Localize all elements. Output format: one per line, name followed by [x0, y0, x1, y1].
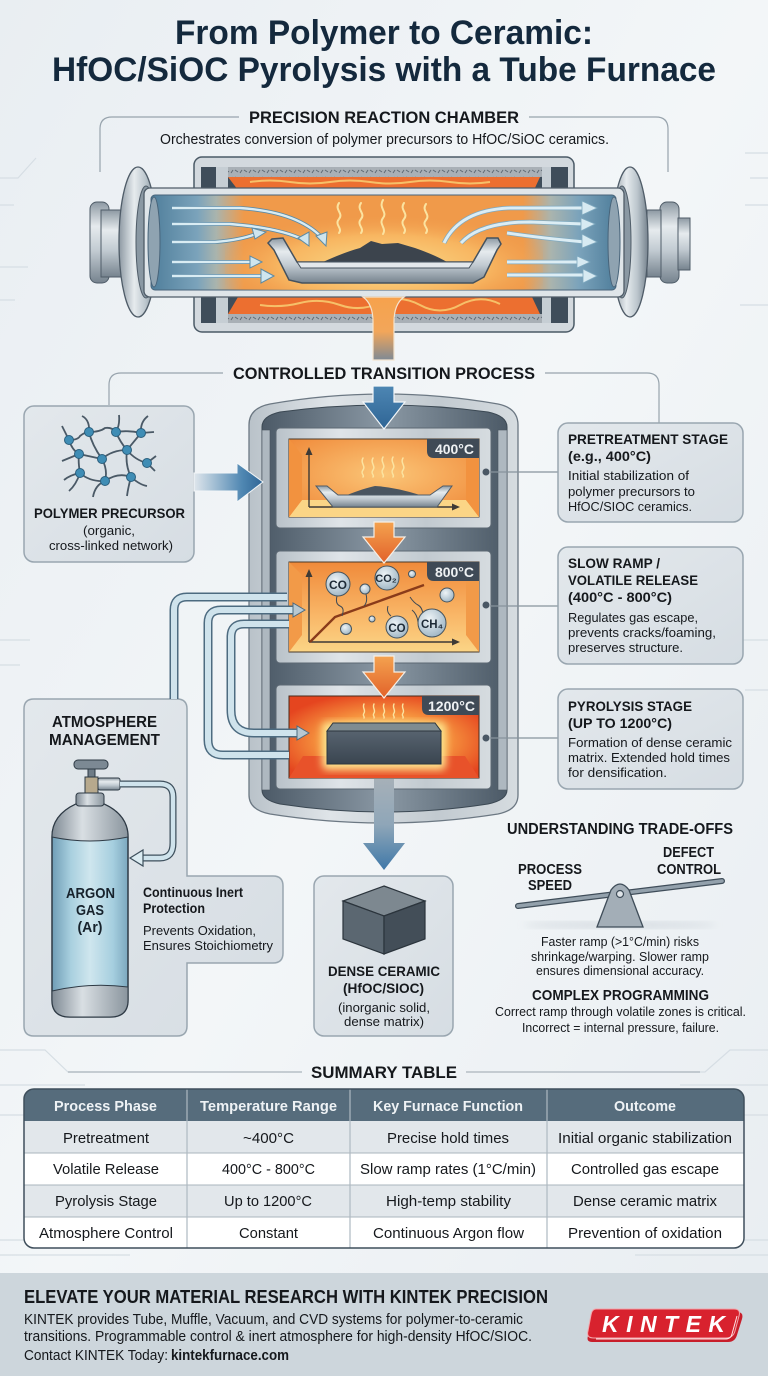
chamber: 800 C: CO — [388, 623, 406, 635]
trade-offs — [495, 821, 746, 1035]
inert protection text: Prevents Oxidation, — [143, 923, 256, 938]
callout: pretreatment stage: Initial stabilization of — [568, 468, 689, 483]
row: atmosphere control: Constant — [239, 1225, 299, 1242]
polymer label: cross-linked network) — [49, 538, 173, 553]
title — [52, 14, 716, 89]
callout: slow ramp: VOLATILE RELEASE — [568, 572, 698, 588]
footer band — [0, 1273, 768, 1376]
sample boat with precursor — [268, 238, 501, 283]
seesaw diagram — [518, 845, 722, 928]
row: pyrolysis stage: Up to 1200°C — [224, 1193, 312, 1210]
row: pretreatment: ~400°C — [243, 1130, 294, 1147]
cylinder label: GAS — [76, 902, 104, 919]
heading: precision reaction chamber: Orchestrates conversion of polymer precursors to HfOC/SiOC ceramics. — [160, 132, 609, 148]
callout: pyrolysis stage — [558, 689, 743, 789]
cylinder outlet pipe — [120, 784, 173, 858]
trade-offs: UNDERSTANDING TRADE-OFFS — [507, 821, 733, 838]
row: volatile release: Volatile Release — [53, 1161, 159, 1178]
panel: atmosphere management — [24, 699, 283, 1036]
table header: Outcome — [614, 1098, 676, 1115]
title: HfOC/SiOC Pyrolysis with a Tube Furnace — [52, 51, 716, 89]
callout: pyrolysis stage: (UP TO 1200°C) — [568, 715, 672, 731]
ceramic label: (inorganic solid, — [338, 1000, 430, 1015]
logo: KINTEK: KINTEK — [602, 1311, 726, 1337]
connector lines to callouts — [490, 472, 558, 738]
trade-off description: Faster ramp (>1°C/min) risks — [541, 934, 699, 949]
callout: slow ramp: preserves structure. — [568, 640, 683, 655]
left flange — [90, 167, 157, 317]
heading: controlled transition process — [109, 364, 659, 423]
logo: KINTEK — [588, 1309, 742, 1342]
seesaw diagram: SPEED — [528, 878, 572, 894]
callout: slow ramp — [558, 547, 743, 664]
callout: slow ramp: SLOW RAMP / — [568, 555, 660, 571]
ceramic label — [328, 963, 440, 1029]
inert protection text: Continuous Inert — [143, 885, 243, 900]
callout: slow ramp: prevents cracks/foaming, — [568, 625, 716, 640]
chamber: 800 C: CH₄ — [421, 619, 443, 631]
reactor vessel — [249, 394, 518, 823]
polymer label: POLYMER PRECURSOR — [34, 505, 185, 521]
summary table — [24, 1089, 744, 1248]
row: atmosphere control: Continuous Argon flow — [373, 1225, 524, 1242]
heading: precision reaction chamber — [100, 108, 668, 172]
arrow: into vessel — [363, 386, 405, 429]
chamber: 400 C: 400°C — [435, 441, 474, 457]
row: pretreatment: Pretreatment — [63, 1130, 150, 1147]
arrow: out of vessel — [363, 779, 405, 870]
right flange — [612, 167, 690, 317]
cylinder label: (Ar) — [78, 919, 102, 936]
icon: argon cylinder — [52, 760, 128, 1017]
connector dots — [482, 468, 490, 742]
trade-off description: shrinkage/warping. Slower ramp — [531, 949, 709, 964]
neck connector — [363, 297, 404, 360]
atmosphere heading: MANAGEMENT — [49, 732, 160, 749]
table header: Temperature Range — [200, 1098, 337, 1115]
callout: pyrolysis stage: Formation of dense ceramic — [568, 735, 733, 750]
complex programming: Correct ramp through volatile zones is critical. — [495, 1004, 746, 1019]
callout: pyrolysis stage: matrix. Extended hold times — [568, 750, 731, 765]
chamber: 1200 C — [276, 685, 491, 789]
heading: summary table: SUMMARY TABLE — [311, 1063, 457, 1082]
row: pretreatment — [63, 1130, 732, 1147]
panel: dense ceramic — [314, 876, 453, 1036]
chamber: 800 C — [276, 551, 491, 663]
callout: slow ramp: Regulates gas escape, — [568, 610, 698, 625]
atmosphere heading: ATMOSPHERE — [52, 714, 157, 731]
cylinder label: ARGON — [66, 885, 115, 902]
title: From Polymer to Ceramic: — [175, 14, 593, 52]
row: volatile release: Controlled gas escape — [571, 1161, 719, 1178]
arrow: transfer to 1200 C — [363, 656, 405, 698]
row: volatile release: Slow ramp rates (1°C/min) — [360, 1161, 536, 1178]
callout: slow ramp: (400°C - 800°C) — [568, 589, 672, 605]
panel: polymer precursor — [24, 406, 194, 562]
ceramic label: DENSE CERAMIC — [328, 963, 440, 979]
row: pretreatment: Precise hold times — [387, 1130, 509, 1147]
callout: pretreatment stage: (e.g., 400°C) — [568, 448, 651, 464]
footer heading: ELEVATE YOUR MATERIAL RESEARCH WITH KINTEK PRECISION — [24, 1287, 548, 1307]
seesaw diagram: CONTROL — [657, 862, 721, 878]
heading: precision reaction chamber: PRECISION REACTION CHAMBER — [249, 108, 519, 127]
table header — [54, 1098, 676, 1115]
chamber: 400 C — [276, 428, 491, 528]
row: volatile release: 400°C - 800°C — [222, 1161, 315, 1178]
row: atmosphere control — [39, 1225, 722, 1242]
vessel shell — [249, 394, 518, 823]
callout: pyrolysis stage: PYROLYSIS STAGE — [568, 698, 692, 714]
icon: polymer network — [62, 415, 156, 497]
furnace housing — [194, 157, 574, 332]
callout: pretreatment stage — [558, 423, 743, 522]
cylinder label — [66, 885, 115, 936]
arrow: transfer to 800 C — [363, 522, 405, 563]
inert protection text: Ensures Stoichiometry — [143, 938, 273, 953]
row: pyrolysis stage: High-temp stability — [386, 1193, 511, 1210]
seesaw diagram: PROCESS — [518, 862, 582, 878]
footer body: Contact KINTEK Today: — [24, 1348, 168, 1364]
table header: Key Furnace Function — [373, 1098, 523, 1115]
footer body: kintekfurnace.com — [171, 1348, 289, 1364]
callout: pyrolysis stage: for densification. — [568, 765, 667, 780]
footer body: KINTEK provides Tube, Muffle, Vacuum, and CVD systems for polymer-to-ceramic — [24, 1312, 523, 1328]
row: pretreatment: Initial organic stabilization — [558, 1130, 732, 1147]
row: atmosphere control: Prevention of oxidation — [568, 1225, 722, 1242]
heat waves — [337, 200, 427, 234]
complex programming: Incorrect = internal pressure, failure. — [522, 1020, 719, 1035]
polymer label — [34, 505, 185, 553]
row: pyrolysis stage — [55, 1193, 717, 1210]
icon: ceramic cube — [343, 886, 425, 954]
inert protection text: Protection — [143, 901, 205, 916]
row: volatile release — [53, 1161, 719, 1178]
row: atmosphere control: Atmosphere Control — [39, 1225, 173, 1242]
quartz tube — [144, 188, 624, 297]
callout: pretreatment stage: PRETREATMENT STAGE — [568, 431, 728, 447]
callout: pretreatment stage: HfOC/SIOC ceramics. — [568, 499, 692, 514]
inert protection text — [143, 885, 273, 953]
gas flow arrows in — [172, 208, 327, 283]
complex programming: COMPLEX PROGRAMMING — [532, 987, 709, 1004]
gas flow arrows out — [444, 201, 597, 283]
gas supply pipes — [174, 597, 309, 755]
footer body — [24, 1312, 532, 1364]
chamber: 800 C: CO₂ — [375, 573, 397, 585]
footer body: transitions. Programmable control & inert atmosphere for high-density HfOC/SIOC. — [24, 1329, 532, 1345]
arrow: polymer into vessel — [194, 463, 263, 502]
tube furnace illustration — [90, 157, 690, 360]
polymer label: (organic, — [83, 523, 135, 538]
chamber: 800 C: 800°C — [435, 564, 474, 580]
ceramic label: (HfOC/SIOC) — [343, 980, 424, 996]
heading: controlled transition process: CONTROLLED TRANSITION PROCESS — [233, 364, 535, 383]
complex programming — [495, 987, 746, 1035]
callout: pretreatment stage: polymer precursors to — [568, 484, 695, 499]
row: pyrolysis stage: Pyrolysis Stage — [55, 1193, 157, 1210]
seesaw diagram: DEFECT — [663, 845, 714, 861]
row: pyrolysis stage: Dense ceramic matrix — [573, 1193, 717, 1210]
chamber: 800 C: CO — [329, 578, 347, 592]
trade-off description — [531, 934, 709, 978]
ceramic label: dense matrix) — [344, 1014, 424, 1029]
chamber: 1200 C: 1200°C — [428, 698, 475, 714]
trade-off description: ensures dimensional accuracy. — [536, 963, 704, 978]
atmosphere heading — [49, 714, 160, 749]
table header: Process Phase — [54, 1098, 157, 1115]
